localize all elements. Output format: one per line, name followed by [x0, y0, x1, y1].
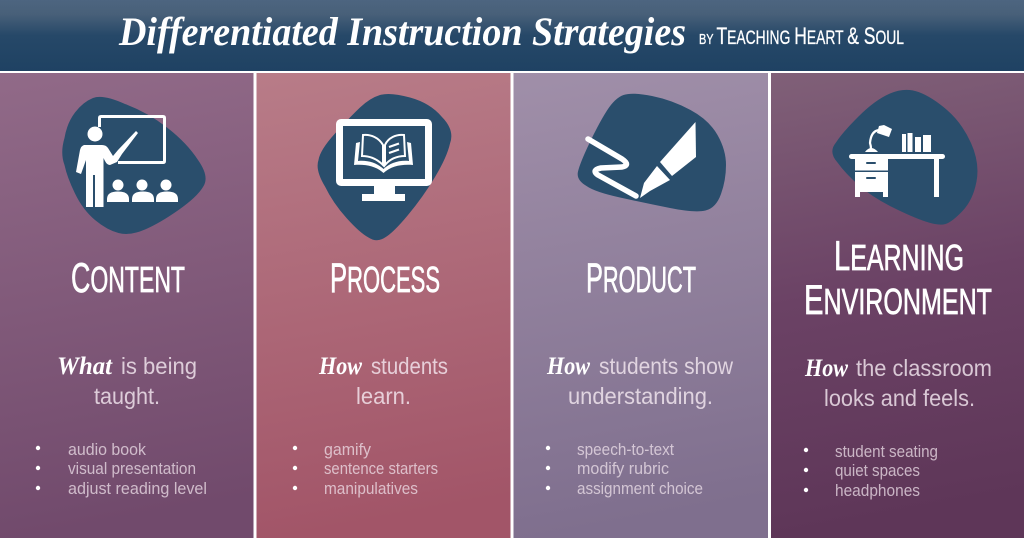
- heading: [804, 232, 992, 323]
- heading: CONTENT: [71, 254, 185, 301]
- description: learn.: [356, 383, 411, 409]
- icon: book on monitor: [318, 94, 451, 240]
- icon: teacher at board: [62, 97, 206, 234]
- description: looks and feels.: [824, 385, 975, 411]
- bullet list: [36, 441, 207, 498]
- panel: learning environment: [771, 73, 1024, 538]
- bullet list: audio book: [68, 441, 147, 459]
- bullet list: visual presentation: [68, 460, 196, 478]
- heading: PROCESS: [330, 254, 440, 301]
- icon: pen stroke: [578, 94, 726, 211]
- bullet list: [293, 441, 438, 498]
- byline: BY TEACHING HEART & SOUL: [699, 23, 904, 50]
- description: students: [371, 353, 448, 379]
- description: [804, 355, 992, 411]
- heading: LEARNING: [834, 232, 964, 279]
- bullet list: [546, 441, 703, 498]
- description: [318, 353, 448, 409]
- title: Differentiated Instruction Strategies: [118, 9, 686, 54]
- bullet list: student seating: [835, 443, 938, 461]
- description: the classroom: [856, 355, 992, 381]
- bullet list: quiet spaces: [835, 462, 920, 480]
- bullet list: headphones: [835, 482, 920, 500]
- description: How: [318, 353, 362, 380]
- icon: desk with lamp and books: [832, 90, 977, 225]
- bullet list: sentence starters: [324, 460, 438, 478]
- description: understanding.: [568, 383, 713, 409]
- bullet list: assignment choice: [577, 480, 703, 498]
- description: is being: [121, 353, 197, 379]
- heading: PRODUCT: [586, 254, 696, 301]
- description: taught.: [94, 383, 160, 409]
- bullet list: gamify: [324, 441, 372, 459]
- description: [546, 353, 733, 409]
- bullet list: manipulatives: [324, 480, 418, 498]
- panel: process: [256, 73, 510, 538]
- header banner: [0, 0, 1024, 71]
- description: How: [804, 355, 848, 382]
- description: What: [57, 353, 113, 380]
- description: students show: [599, 353, 733, 379]
- bullet list: speech-to-text: [577, 441, 674, 459]
- panel: product: [514, 73, 768, 538]
- bullet list: [804, 443, 938, 500]
- description: How: [546, 353, 590, 380]
- panel: content: [0, 73, 254, 538]
- bullet list: modify rubric: [577, 460, 669, 478]
- description: [57, 353, 197, 409]
- bullet list: adjust reading level: [68, 480, 207, 498]
